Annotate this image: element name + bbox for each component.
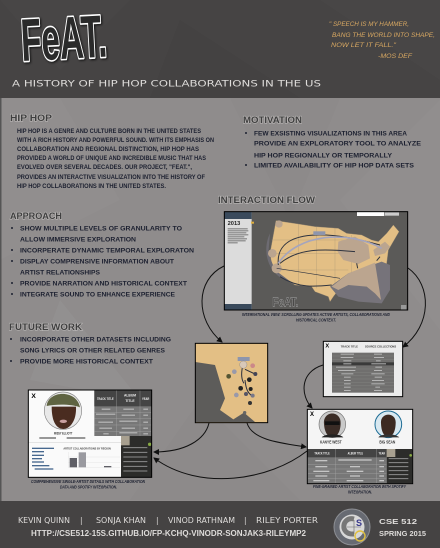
caption: collaboration view: INTEGRATION.: [348, 490, 372, 494]
screenshot: single artist view: MISSY ELLIOTT: [54, 430, 73, 435]
text block: hip hop description: EVOLVED OVER SEVERAL DECADES. OUR PROJECT, "FEAT.",: [17, 164, 192, 171]
portrait: kanye west: [319, 411, 346, 438]
arrow: collaboration view to artist view: [154, 451, 307, 479]
track table: [94, 390, 152, 436]
author names: |: [156, 516, 159, 525]
heading: motivation: MOTIVATION: [243, 115, 302, 125]
course label: CSE 512: [379, 517, 417, 526]
quote: NOW LET IT FALL.": [331, 42, 397, 49]
gray neighbouring region: [195, 362, 255, 422]
list: approach bullets: PROVIDE NARRATION AND HISTORICAL CONTEXT: [20, 280, 187, 288]
text block: hip hop description: PROVIDES AN INTERACTIVE VISUALIZATION INTO THE HISTORY OF: [17, 174, 205, 181]
screenshot: single artist view: [28, 390, 152, 477]
caption: collaboration view: [313, 484, 407, 494]
quote: -MOS DEF: [378, 53, 413, 60]
logo: FEAT.: FeAT.: [19, 3, 109, 74]
heading: approach: APPROACH: [10, 211, 62, 221]
text block: hip hop description: HIP HOP IS A GENRE AND CULTURE BORN IN THE UNITED STATES: [17, 128, 202, 135]
portrait: big sean: [375, 411, 402, 438]
quote: [329, 21, 435, 60]
panel: approach: [10, 211, 194, 298]
list: approach bullets: [11, 226, 194, 298]
icon: university cse logo: S: [356, 518, 362, 528]
list: motivation bullets: HIP HOP REGIONALLY OR TEMPORALLY: [254, 152, 393, 160]
list: approach bullets: ALLOW IMMERSIVE EXPLORATION: [20, 236, 136, 244]
icon: university cse logo: [334, 509, 370, 545]
list: motivation bullets: [245, 130, 422, 170]
list: future work bullets: INCORPORATE OTHER DATASETS INCLUDING: [20, 336, 171, 344]
caption: single artist view: DATA AND SPOTIFY INTEGRATION.: [60, 484, 117, 490]
course label: SPRING 2015: [379, 529, 426, 538]
search box: [357, 212, 399, 216]
author names: |: [244, 516, 247, 525]
list: motivation bullets: FEW EXSISTING VISUALIZATIONS IN THIS AREA: [254, 130, 407, 138]
track table: TRACK TITLE: [314, 451, 330, 455]
panel: hip hop: [10, 113, 214, 190]
arrow: map to state view: [202, 266, 224, 342]
artist list: [28, 443, 121, 470]
screenshot: collaboration view: [307, 409, 413, 484]
list: future work bullets: PROVIDE MORE HISTORICAL CONTEXT: [20, 358, 153, 366]
heading: hip hop: HIP HOP: [10, 113, 52, 123]
portrait: missy elliott: [44, 392, 82, 429]
track table: ALBUM TITLE: [348, 451, 364, 455]
list: approach bullets: INCORPERATE DYNAMIC TEMPORAL EXPLORATON: [20, 248, 194, 254]
track table: TITLE: [125, 399, 135, 403]
track table: ALBUM: [124, 394, 136, 398]
screenshot: state zoom view: [195, 343, 268, 423]
tooltip: [313, 231, 325, 235]
screenshot: artist track table: [323, 341, 403, 397]
highlighted regions: [266, 220, 390, 303]
panel: future work: [9, 322, 171, 366]
spotify player: [121, 436, 152, 477]
track table: YEAR: [142, 397, 150, 401]
list: motivation bullets: PROVIDE AN EXPLORATORY TOOL TO ANALYZE: [254, 140, 422, 148]
author names: RILEY PORTER: [256, 516, 318, 525]
track table: YEAR: [379, 451, 385, 455]
footer band: [0, 501, 440, 548]
spotify player: [387, 449, 412, 483]
caption: national map view: INTERNATIONAL VIEW: SCROLLING UPDATES ACTIVE ARTISTS, COLLABORATIONS AND: [242, 312, 391, 317]
screenshot: collaboration view: KANYE WEST: [320, 439, 342, 444]
header band: [0, 0, 440, 98]
author names: |: [80, 516, 83, 525]
arrow: map to table view: [403, 268, 425, 347]
screenshot: collaboration view: BIG SEAN: [379, 439, 395, 444]
screenshot: single artist view: X: [31, 393, 36, 400]
heading: interaction flow: INTERACTION FLOW: [218, 195, 316, 205]
quote: " SPEECH IS MY HAMMER,: [329, 21, 409, 28]
screenshot: artist track table: SOURCE COLLECTIONS: [365, 345, 396, 349]
track table: TRACK TITLE: [97, 397, 114, 401]
map watermark logo: FeAT.: [272, 296, 298, 310]
state boundary lines: [272, 224, 355, 290]
author names: [18, 516, 318, 525]
author names: KEVIN QUINN: [18, 516, 70, 525]
list: motivation bullets: LIMITED AVAILABILITY OF HIP HOP DATA SETS: [254, 162, 415, 170]
list: approach bullets: ARTIST RELATIONSHIPS: [20, 270, 101, 276]
text block: hip hop description: WITH A RICH HISTORY AND POWERFUL SOUND. WITH ITS EMPHASIS ON: [17, 137, 214, 144]
artist nodes: [226, 357, 257, 414]
list: approach bullets: INTEGRATE SOUND TO ENHANCE EXPERIENCE: [20, 292, 176, 298]
bar chart: artist collaborations by region: ARTIST COLLABORATIONS BY REGION: [63, 447, 111, 450]
caption: single artist view: [31, 479, 146, 490]
map of the united states: [270, 221, 399, 302]
caption: national map view: HISTORICAL CONTEXT.: [296, 318, 336, 322]
heading: future work: FUTURE WORK: [9, 322, 83, 332]
list: future work bullets: [10, 336, 171, 366]
list: approach bullets: DISPLAY COMPRENSIVE INFORMATION ABOUT: [20, 258, 174, 266]
project url: HTTP://CSE512-15S.GITHUB.IO/FP-KCHQ-VINODR-SONJAK3-RILEYMP2: [31, 529, 307, 538]
screenshot: artist track table: X: [325, 343, 329, 349]
sidebar: [224, 212, 254, 310]
caption: collaboration view: FINE-GRAINED ARTIST COLLABORATION WITH SPOTIFY: [313, 484, 407, 489]
collaboration arcs: [277, 235, 382, 286]
arrow: state view to collaboration view: [247, 423, 306, 447]
list: future work bullets: SONG LYRICS OR OTHER RELATED GENRES: [20, 348, 166, 354]
text block: hip hop description: HIP HOP COLLABORATIONS IN THE UNITED STATES.: [17, 183, 166, 190]
quote: BANG THE WORLD INTO SHAPE,: [332, 32, 435, 39]
sidebar: 2013: [228, 221, 240, 227]
arrow: state view to artist view: [154, 423, 209, 452]
text block: hip hop description: PROVIDED A WORLD OF UNIQUE AND INCREDIBLE MUSIC THAT HAS: [17, 155, 207, 162]
screenshot: national map view: [224, 212, 408, 310]
screenshot: collaboration view: X: [310, 412, 314, 418]
arrow: table to collaboration view: [304, 365, 323, 408]
caption: single artist view: COMPREHENSIVE SINGLE-ARTIST DETAILS WITH COLLABORATION: [31, 479, 146, 484]
table rows: [332, 353, 394, 393]
author names: SONJA KHAN: [96, 516, 146, 525]
caption: national map view: [242, 312, 391, 322]
subtitle: A HISTORY OF HIP HOP COLLABORATIONS IN THE US: [12, 80, 321, 90]
screenshot: artist track table: TRACK TITLE: [341, 345, 358, 349]
list: approach bullets: SHOW MULTIPLE LEVELS OF GRANULARITY TO: [20, 226, 182, 232]
author names: VINOD RATHNAM: [168, 516, 235, 525]
text block: hip hop description: COLLABORATION AND REGIONAL DISTINCTION, HIP HOP HAS: [17, 146, 200, 153]
course label: [379, 517, 426, 538]
text block: hip hop description: [17, 128, 214, 190]
track table: [308, 449, 387, 483]
panel: motivation: [243, 115, 422, 170]
